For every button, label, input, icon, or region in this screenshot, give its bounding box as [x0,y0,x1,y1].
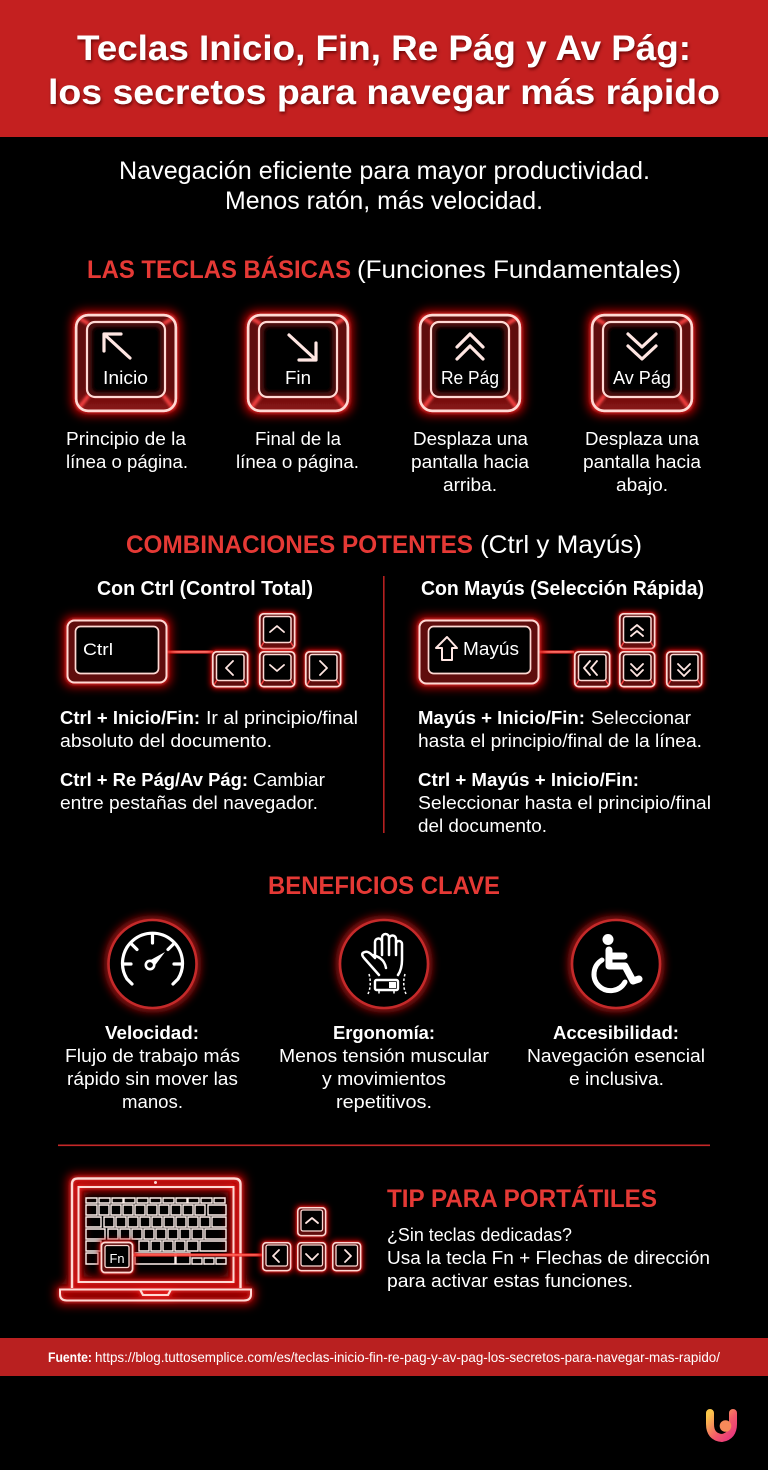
text: Ctrl Mayús Inicio/Fin [418,770,711,836]
text: velocidad: Flujo de trabajo más [65,1046,240,1066]
text: Ctrl Inicio/Fin: Ir al principio/final [206,708,358,728]
icon: hand and wrist [340,920,428,1008]
panel: velocidad [65,920,240,1112]
footer source banner: Fuente: [48,1349,92,1365]
diagram: Mayús and arrow keys: Mayús [463,639,519,659]
text: Mayús Inicio/Fin [418,708,702,751]
description: Re Pág: Desplaza una [413,429,529,449]
title banner: Teclas Inicio, Fin, Re Pág y Av Pág: [77,29,691,68]
heading: combinaciones potentes: (Ctrl y Mayús) [480,531,642,559]
text: Ctrl Inicio/Fin [60,708,358,751]
key: Inicio: Inicio [103,368,148,388]
description: Av Pág: pantalla hacia [583,452,702,472]
heading: beneficios clave: BENEFICIOS CLAVE [268,872,500,900]
key: Fn: Fn [110,1251,124,1266]
text: velocidad [65,1023,240,1112]
description: Re Pág [411,429,530,495]
panel: con Ctrl [60,578,358,813]
diagram: Mayús and arrow keys [420,614,702,687]
key: Re Pág [420,315,520,411]
subtitle: Menos ratón, más velocidad. [225,187,543,215]
text: tip [387,1225,710,1291]
text: Ctrl Re Pág/Av Pág: Ctrl + Re Pág/Av Pág: [60,770,248,790]
description: Re Pág: pantalla hacia [411,452,530,472]
panel: ergonomía [279,920,489,1112]
diagram: Ctrl and arrow keys: Ctrl [83,640,113,659]
heading: combinaciones potentes [126,531,642,559]
panel: tip para portátiles [60,1178,710,1300]
text: Ctrl Mayús Inicio/Fin: del documento. [418,816,547,836]
text: accesibilidad: Navegación esencial [527,1046,705,1066]
text: Mayús Inicio/Fin: hasta el principio/final de la línea. [418,731,702,751]
panel: accesibilidad [527,920,705,1089]
illustration: laptop with Fn and arrow keys [60,1178,361,1300]
text: Mayús Inicio/Fin: Seleccionar [591,708,691,728]
key: Av Pág: Av Pág [613,368,671,388]
description: Re Pág: arriba. [443,475,497,495]
description: Fin: línea o página. [236,452,359,472]
key: Inicio [76,315,176,411]
text: Ctrl Mayús Inicio/Fin: Ctrl + Mayús + Inicio/Fin: [418,770,639,790]
description: Inicio [66,429,188,472]
text: Ctrl Inicio/Fin: absoluto del documento. [60,731,272,751]
subtitle [119,157,650,215]
description: Fin: Final de la [255,429,342,449]
description: Av Pág: Desplaza una [585,429,700,449]
logo [710,1413,733,1438]
description: Av Pág [583,429,702,495]
text: accesibilidad [527,1023,705,1089]
description: Inicio: línea o página. [66,452,188,472]
heading: las teclas básicas: LAS TECLAS BÁSICAS [87,255,351,284]
text: ergonomía: repetitivos. [336,1092,432,1112]
subtitle: Navegación eficiente para mayor productividad. [119,157,650,185]
text: accesibilidad: e inclusiva. [569,1069,664,1089]
title banner [0,0,768,137]
description: Av Pág: abajo. [616,475,668,495]
key: Re Pág: Re Pág [441,368,499,388]
panel: con Mayús [418,578,711,836]
text: Ctrl Mayús Inicio/Fin: Seleccionar hasta el principio/final [418,793,711,813]
key: Av Pág [592,315,692,411]
heading: las teclas básicas [87,255,681,284]
text: Ctrl Re Pág/Av Pág [60,770,325,813]
description: Fin [236,429,359,472]
subheading: con Ctrl: Con Ctrl (Control Total) [97,578,313,600]
text: Ctrl Inicio/Fin: Ctrl + Inicio/Fin: [60,708,200,728]
heading: tip para portátiles: TIP PARA PORTÁTILES [387,1184,657,1213]
text: velocidad: manos. [122,1092,183,1112]
subheading: con Mayús: Con Mayús (Selección Rápida) [421,578,704,600]
text: tip: Usa la tecla Fn + Flechas de dirección [387,1248,710,1268]
text: ergonomía [279,1023,489,1112]
text: velocidad: rápido sin mover las [67,1069,238,1089]
text: tip: ¿Sin teclas dedicadas? [387,1225,572,1245]
key: Fin [248,315,348,411]
text: Ctrl Re Pág/Av Pág: entre pestañas del navegador. [60,793,318,813]
heading: combinaciones potentes: COMBINACIONES POTENTES [126,531,473,559]
key: Fn [102,1242,132,1272]
heading: las teclas básicas: (Funciones Fundamentales) [357,256,681,284]
title banner: los secretos para navegar más rápido [48,73,720,112]
text: tip: para activar estas funciones. [387,1271,633,1291]
footer source banner [0,1338,768,1376]
panel: teclas básicas [66,315,702,495]
text: ergonomía: y movimientos [322,1069,446,1089]
text: ergonomía: Menos tensión muscular [279,1046,489,1066]
description: Inicio: Principio de la [66,429,187,449]
text: Ctrl Re Pág/Av Pág: Cambiar [253,770,325,790]
laptop keyboard [86,1198,226,1264]
icon: speedometer [108,920,196,1008]
key: Fin: Fin [285,368,311,388]
diagram: Ctrl and arrow keys [68,614,341,687]
icon: wheelchair [572,920,660,1008]
text: ergonomía: Ergonomía: [333,1023,435,1043]
text: velocidad: Velocidad: [105,1023,199,1043]
footer source banner: https://blog.tuttosemplice.com/es/teclas-inicio-fin-re-pag-y-av-pag-los-secretos-para-navegar-mas-rapido/ [95,1349,720,1365]
text: Mayús Inicio/Fin: Mayús + Inicio/Fin: [418,708,585,728]
text: accesibilidad: Accesibilidad: [553,1023,679,1043]
